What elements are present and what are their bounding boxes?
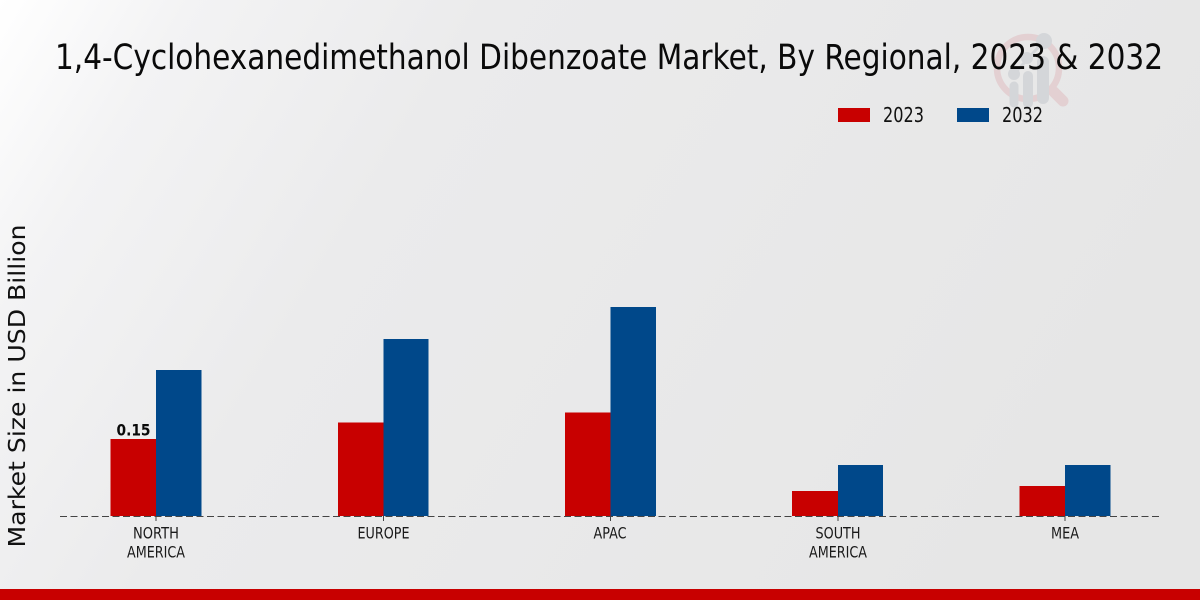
region: North America	[110, 370, 202, 516]
label: North America: NORTH	[133, 524, 179, 542]
label: APAC: APAC	[594, 524, 626, 542]
region: APAC	[565, 307, 656, 516]
legend item: 2032	[957, 103, 1043, 127]
region: MEA	[1020, 465, 1110, 516]
value label: 0.15	[116, 420, 150, 440]
region: Europe	[338, 339, 428, 516]
label: South America: AMERICA	[809, 542, 867, 562]
legend item: 2032: 2032	[1002, 103, 1043, 127]
legend	[838, 103, 1043, 127]
label: Europe: EUROPE	[358, 524, 410, 542]
label: MEA: MEA	[1051, 524, 1079, 542]
icon: watermark logo	[997, 33, 1063, 103]
label: North America: AMERICA	[127, 542, 185, 562]
legend item: 2023	[838, 103, 924, 127]
x-axis labels	[127, 524, 1079, 562]
legend item: 2023: 2023	[883, 103, 924, 127]
footer bar	[0, 589, 1200, 600]
y-axis label: Market Size in USD Billion	[3, 225, 31, 548]
region: South America	[792, 465, 883, 516]
label: South America: SOUTH	[816, 524, 860, 542]
bar chart	[110, 307, 1110, 516]
